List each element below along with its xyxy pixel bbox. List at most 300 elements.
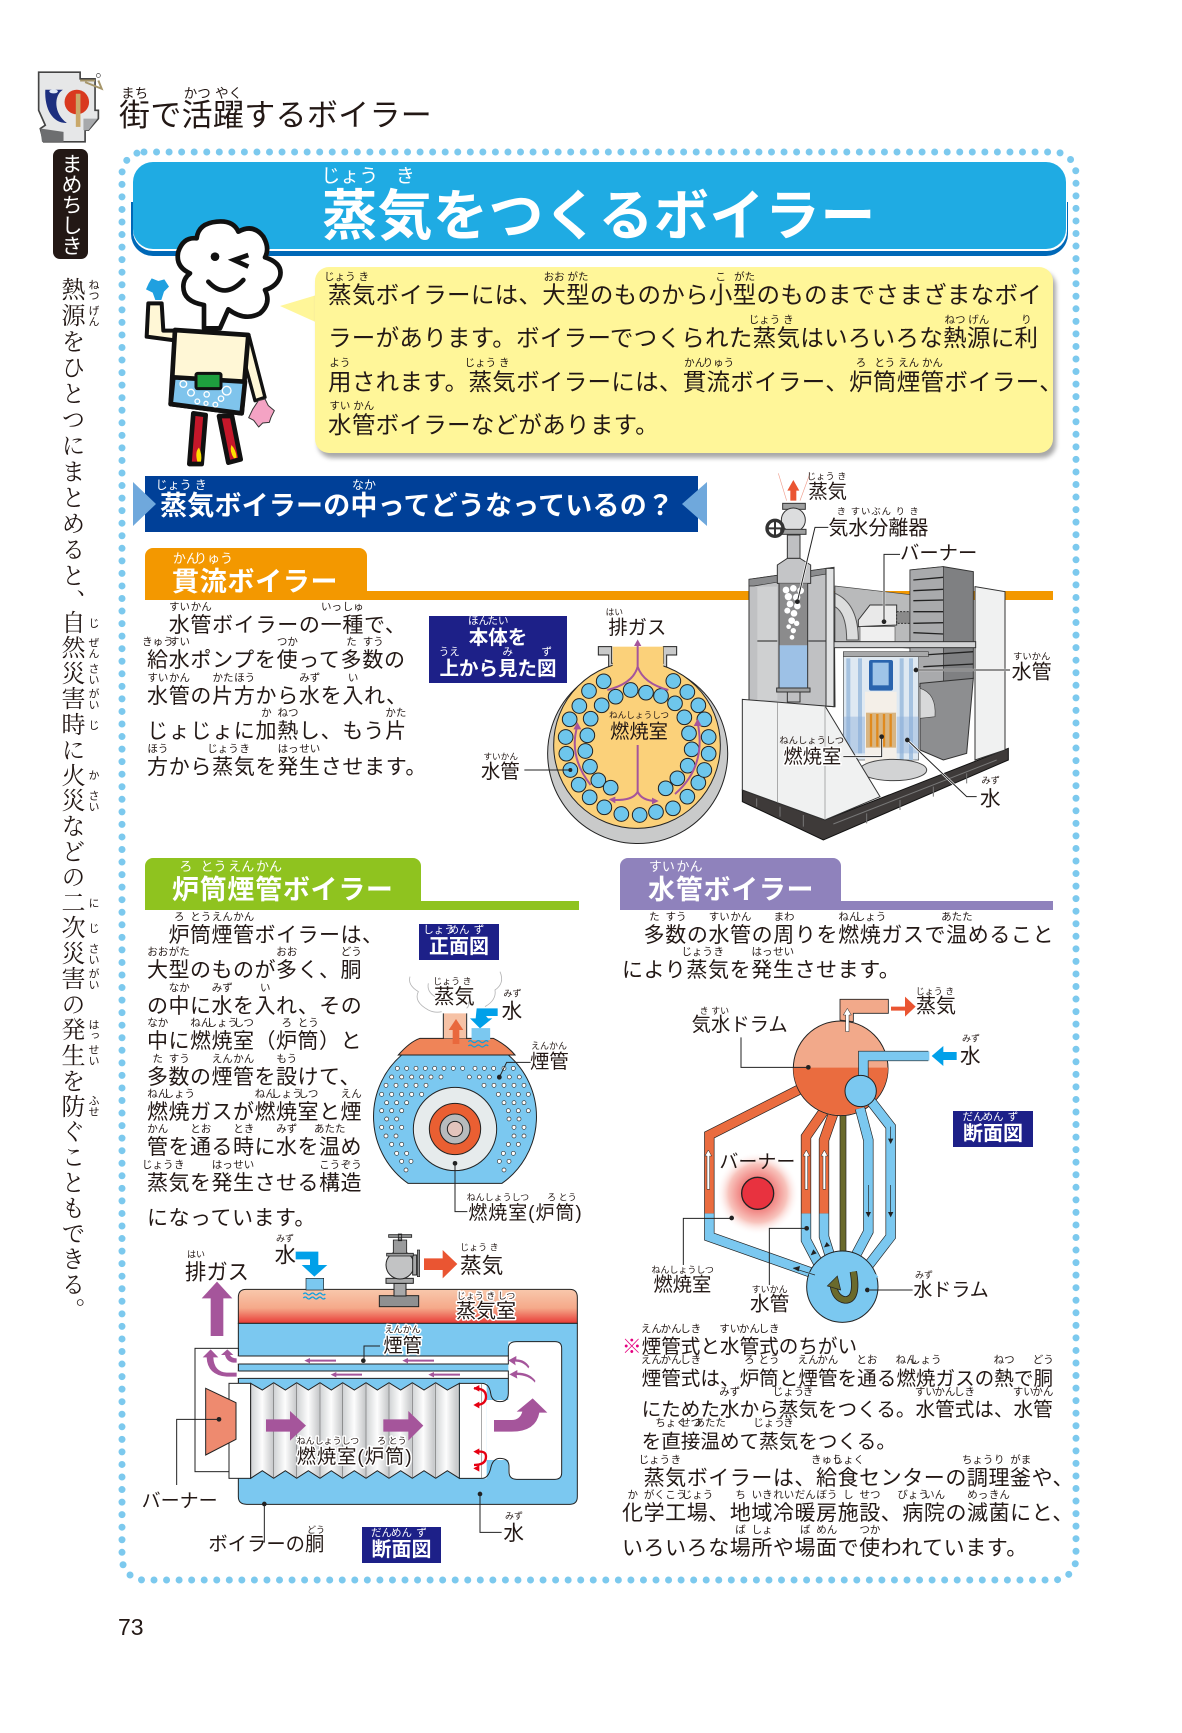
section banner: なか: [352, 478, 376, 492]
section tab: once-through boiler: りゅう: [194, 551, 233, 566]
section tab: fire-tube boiler: えん: [228, 859, 254, 874]
diagram: water-tube boiler cross section: 水管: [750, 1294, 789, 1316]
speech bubble: じょう: [324, 270, 356, 282]
label: front view: [419, 924, 499, 960]
closing paragraph: れい: [773, 1489, 794, 1501]
speech bubble: かん: [684, 357, 705, 369]
fire-tube boiler text: すう: [169, 1053, 190, 1065]
fire-tube boiler text: せい: [233, 1159, 254, 1171]
fire-tube boiler text: しょう: [164, 1088, 195, 1100]
label: top view: ず: [542, 646, 552, 658]
fire-tube boiler text: 大型のものが多く、胴: [147, 959, 362, 982]
text: きゅう: [811, 1454, 843, 1466]
diagram: water-tube boiler cross section: [651, 987, 989, 1323]
closing paragraph: いき: [752, 1489, 773, 1501]
fire-tube boiler text: の中に水を入れ、その: [147, 995, 362, 1018]
section tab: fire-tube boiler: 炉筒煙管ボイラー: [172, 875, 394, 905]
text: しょう: [855, 911, 886, 923]
diagram: water-tube boiler cross section: すいかん: [752, 1284, 788, 1294]
diagram: once-through boiler top view: ねんしょうしつ: [609, 710, 669, 720]
text: しょく: [833, 1454, 864, 1466]
text: すい: [709, 911, 730, 923]
fire-tube boiler text: がた: [169, 946, 190, 958]
text: はっ: [87, 1019, 99, 1041]
diagram: once-through boiler cutaway: 水: [980, 788, 1001, 810]
label: top view: 上から見た図: [439, 658, 557, 680]
fire-tube boiler text: なか: [169, 982, 190, 994]
text: ねつ: [87, 279, 99, 301]
speech bubble: おお: [544, 270, 565, 282]
note: difference between fire-tube and water-tube: ちょく: [655, 1417, 687, 1429]
note: difference between fire-tube and water-tube: ろ: [744, 1354, 755, 1366]
side column text, part 2: [57, 610, 100, 1323]
fire-tube boiler text: じょう: [142, 1159, 174, 1171]
label: cross section (fire-tube): 断面図: [372, 1539, 432, 1561]
closing paragraph: しょ: [752, 1524, 773, 1536]
speech bubble: とう: [874, 357, 895, 369]
closing paragraph: せつ: [859, 1489, 880, 1501]
once-through boiler text: きゅう: [142, 636, 174, 648]
text: に: [87, 897, 99, 908]
fire-tube boiler text: かん: [147, 1123, 168, 1135]
fire-tube boiler text: しつ: [298, 1088, 318, 1100]
once-through boiler text: 方から蒸気を発生させます。: [147, 756, 427, 779]
side column text, part 1: [57, 277, 100, 615]
speech bubble: えん: [898, 357, 919, 369]
fire-tube boiler text: しょう: [206, 1017, 238, 1029]
fire-tube boiler text: ねん: [255, 1088, 276, 1100]
text: か: [87, 770, 99, 781]
closing paragraph: 蒸気ボイラーは、給食センターの調理釜や、: [644, 1467, 1074, 1490]
label: top view: ほん: [468, 614, 489, 626]
diagram: fire-tube boiler cross section: じょう き しつ: [457, 1291, 515, 1301]
text: じ: [87, 923, 99, 934]
section tab: water-tube boiler: かん: [677, 859, 703, 874]
once-through boiler text: ねつ: [278, 707, 299, 719]
once-through boiler text: 水管の片方から水を入れ、: [147, 685, 408, 708]
orange section bar: [145, 591, 1053, 600]
speech bubble: こ: [716, 270, 726, 282]
chapter heading: 街で活躍するボイラー: [119, 98, 432, 133]
text: かん: [233, 911, 254, 923]
diagram: once-through boiler top view: すいかん: [483, 752, 518, 762]
note: difference between fire-tube and water-tube: ねん: [896, 1354, 917, 1366]
speech bubble: かん: [922, 357, 943, 369]
note: difference between fire-tube and water-tube: を直接温めて蒸気をつくる。: [642, 1430, 896, 1452]
diagram: fire-tube boiler front view: 燃焼室(炉筒): [468, 1202, 582, 1224]
text: すう: [666, 911, 687, 923]
text: しゅ: [343, 601, 364, 613]
once-through boiler text: ほう: [147, 743, 168, 755]
text: さい: [87, 663, 99, 685]
chapter icon: boiler cutaway: [38, 71, 104, 143]
water-tube boiler text: 多数の水管の周りを燃焼ガスで温めること: [644, 924, 1054, 947]
diagram: water-tube boiler cross section: 気水ドラム: [692, 1014, 788, 1036]
diagram: fire-tube boiler front view: ねんしょうしつ ろ とう: [467, 1193, 577, 1203]
text: り: [994, 1454, 1004, 1466]
diagram: fire-tube boiler cross section: みず: [276, 1233, 294, 1243]
text: かん: [730, 911, 751, 923]
diagram: once-through boiler top view: [481, 607, 728, 844]
diagram: once-through boiler cutaway: 気水分離器: [828, 516, 928, 539]
diagram: water-tube boiler cross section: バーナー: [719, 1152, 795, 1173]
label: top view: み: [502, 646, 513, 658]
section tab: water-tube boiler: [620, 858, 1053, 910]
section tab: once-through boiler: [145, 548, 367, 600]
speech bubble: ねつ: [944, 314, 965, 326]
closing paragraph: びょう: [897, 1489, 929, 1501]
diagram: fire-tube boiler cross section: 煙管: [383, 1335, 422, 1357]
speech bubble: がた: [567, 270, 588, 282]
text: かん: [660, 1322, 681, 1334]
diagram: once-through boiler cutaway: みず: [981, 776, 1000, 786]
diagram: fire-tube boiler front view: じょう き: [433, 977, 472, 987]
fire-tube boiler text: 多数の煙管を設けて、: [147, 1066, 361, 1089]
diagram: fire-tube boiler cross section: 蒸気: [460, 1253, 503, 1278]
text: じ: [87, 719, 99, 730]
label: front view: しょう: [423, 924, 455, 936]
section tab: water-tube boiler: 水管ボイラー: [648, 875, 814, 905]
fire-tube boiler text: みず: [212, 982, 233, 994]
water-tube boiler text: はっ: [752, 946, 773, 958]
speech bubble: き: [783, 314, 794, 326]
diagram: once-through boiler top view: 燃焼室: [610, 721, 668, 743]
closing paragraph: じょう: [682, 1489, 713, 1501]
section banner: 蒸気ボイラーの中ってどうなっているの？: [160, 491, 674, 521]
label: front view: めん: [448, 924, 470, 936]
main title banner: [131, 162, 1068, 256]
text: かつ: [184, 86, 211, 101]
note: difference between fire-tube and water-tube: しき: [680, 1354, 701, 1366]
once-through boiler text: はっ: [278, 743, 299, 755]
closing paragraph: し: [843, 1489, 854, 1501]
label: top view: [429, 616, 567, 683]
once-through boiler text: つか: [277, 636, 298, 648]
fire-tube boiler text: [142, 911, 384, 1230]
once-through boiler text: い: [348, 672, 358, 684]
fire-tube boiler text: 燃焼ガスが燃焼室と煙: [147, 1101, 362, 1124]
fire-tube boiler text: き: [174, 1159, 184, 1171]
diagram: fire-tube boiler front view: みず: [503, 988, 521, 998]
note: difference between fire-tube and water-tube: あたた: [694, 1417, 726, 1429]
fire-tube boiler text: しょう: [271, 1088, 302, 1100]
speech bubble: 用されます。蒸気ボイラーには、貫流ボイラー、炉筒煙管ボイラー、: [328, 369, 1063, 395]
text: さい: [87, 943, 99, 965]
text: えん: [212, 911, 233, 923]
text: じ: [87, 617, 99, 628]
speech bubble: き: [499, 357, 509, 369]
note: difference between fire-tube and water-tube: すい: [915, 1386, 936, 1398]
text: ろ: [174, 911, 184, 923]
text: まわ: [774, 911, 795, 923]
text: いっ: [321, 601, 342, 613]
label: cross section (fire-tube): だん: [371, 1526, 392, 1538]
section tab: water-tube boiler: すい: [649, 859, 675, 874]
note: difference between fire-tube and water-tube: じょう: [773, 1386, 804, 1398]
once-through boiler text: [142, 601, 427, 779]
text: がい: [87, 688, 99, 710]
diagram: fire-tube boiler cross section: えんかん: [385, 1325, 421, 1335]
text: ねん: [838, 911, 859, 923]
section tab: fire-tube boiler: [145, 858, 579, 910]
label: front view: 正面図: [429, 936, 489, 958]
text: さい: [87, 790, 99, 812]
note: difference between fire-tube and water-tube: みず: [719, 1386, 740, 1398]
speech bubble: じょう: [749, 314, 780, 326]
label: cross section (water-tube): 断面図: [963, 1123, 1023, 1145]
diagram: once-through boiler cutaway: じょう き: [807, 472, 847, 482]
diagram: water-tube boiler cross section: みず: [915, 1270, 933, 1280]
diagram: once-through boiler cutaway: ねんしょうしつ: [779, 736, 844, 746]
section banner: [133, 476, 707, 532]
once-through boiler text: かん: [169, 672, 190, 684]
fire-tube boiler text: 炉筒煙管ボイラーは、: [168, 924, 384, 947]
fire-tube boiler text: い: [260, 982, 270, 994]
closing paragraph: いん: [924, 1489, 945, 1501]
speech bubble: [280, 267, 1063, 461]
text: ぜん: [87, 637, 99, 659]
fire-tube boiler text: おお: [147, 946, 168, 958]
diagram: water-tube boiler cross section: 燃焼室: [653, 1274, 711, 1296]
speech bubble: き: [358, 270, 369, 282]
main title banner: じょう: [321, 166, 378, 187]
note: difference between fire-tube and water-tube: しき: [954, 1386, 975, 1398]
note: difference between fire-tube and water-tube: すい: [1013, 1386, 1034, 1398]
text: がま: [1010, 1454, 1031, 1466]
diagram: water-tube boiler cross section: 水: [960, 1045, 981, 1068]
water-tube boiler text: により蒸気を発生させます。: [622, 959, 900, 982]
fire-tube boiler text: こう: [319, 1159, 340, 1171]
diagram: fire-tube boiler cross section: どう: [307, 1525, 325, 1535]
fire-tube boiler text: た: [152, 1053, 163, 1065]
speech bubble: ラーがあります。ボイラーでつくられた蒸気はいろいろな熱源に利: [328, 325, 1038, 351]
closing paragraph: ち: [735, 1489, 746, 1501]
speech bubble: じょう: [465, 357, 496, 369]
text: かん: [739, 1322, 760, 1334]
diagram: fire-tube boiler cross section: みず: [505, 1511, 523, 1521]
fire-tube boiler text: もう: [276, 1053, 297, 1065]
text: ちょう: [962, 1454, 993, 1466]
fire-tube boiler text: はっ: [212, 1159, 233, 1171]
text: がい: [87, 968, 99, 990]
label: top view: 本体を: [469, 627, 527, 649]
note: difference between fire-tube and water-tube: どう: [1033, 1354, 1054, 1366]
note: difference between fire-tube and water-tube: かん: [660, 1354, 681, 1366]
once-through boiler text: か: [261, 707, 272, 719]
fire-tube boiler text: とお: [190, 1123, 211, 1135]
label: top view: うえ: [439, 646, 460, 658]
label: cross section (fire-tube): ず: [416, 1526, 427, 1538]
diagram: once-through boiler cutaway: バーナー: [900, 544, 977, 564]
note: difference between fire-tube and water-tube: しょう: [910, 1354, 941, 1366]
closing paragraph: つか: [859, 1524, 880, 1536]
fire-tube boiler text: えん: [341, 1088, 362, 1100]
diagram: once-through boiler top view: 排ガス: [608, 617, 666, 639]
diagram: fire-tube boiler front view: 蒸気: [434, 985, 475, 1008]
text: じょう: [639, 1454, 670, 1466]
note: difference between fire-tube and water-tube: ※煙管式と水管式のちがい: [622, 1336, 857, 1358]
speech bubble: ろ: [856, 357, 866, 369]
side label: mamechishiki: まめちしき: [59, 153, 82, 255]
text: しき: [680, 1322, 701, 1334]
once-through boiler text: せい: [299, 743, 320, 755]
label: cross section (water-tube): ず: [1008, 1110, 1018, 1122]
diagram: fire-tube boiler front view: 水: [502, 1000, 523, 1023]
water-tube boiler text: せい: [773, 946, 794, 958]
label: cross section (fire-tube): めん: [391, 1526, 412, 1538]
fire-tube boiler text: しつ: [234, 1017, 254, 1029]
closing paragraph: か: [628, 1489, 638, 1501]
diagram: water-tube boiler cross section: き すい: [700, 1006, 729, 1016]
note: difference between fire-tube and water-tube: かん: [817, 1354, 838, 1366]
closing paragraph: がく: [644, 1489, 665, 1501]
diagram: water-tube boiler cross section: じょう き: [916, 987, 954, 997]
closing paragraph: だん: [795, 1489, 816, 1501]
note: difference between fire-tube and water-tube: えん: [798, 1354, 819, 1366]
diagram: fire-tube boiler cross section: はい: [187, 1249, 205, 1259]
fire-tube boiler text: ろ: [282, 1017, 292, 1029]
side label: mamechishiki: [53, 149, 88, 259]
diagram: once-through boiler top view: はい: [606, 607, 623, 617]
note: difference between fire-tube and water-tube: かん: [1032, 1386, 1053, 1398]
mascot character: [144, 219, 283, 466]
once-through boiler text: すい: [147, 672, 168, 684]
fire-tube boiler text: ねん: [190, 1017, 211, 1029]
speech bubble: 水管ボイラーなどがあります。: [328, 412, 659, 438]
diagram: fire-tube boiler cross section: バーナー: [142, 1491, 218, 1512]
once-through boiler text: すう: [363, 636, 384, 648]
diagram: fire-tube boiler front view: えんかん: [531, 1041, 567, 1051]
diagram: once-through boiler cutaway: き すいぶん り き: [837, 507, 920, 517]
fire-tube boiler text: 蒸気を発生させる構造: [147, 1172, 362, 1195]
diagram: water-tube boiler cross section: 水ドラム: [913, 1279, 989, 1301]
text: せい: [87, 1044, 99, 1066]
fire-tube boiler text: えん: [212, 1053, 233, 1065]
fire-tube boiler text: みず: [276, 1123, 297, 1135]
section tab: once-through boiler: かん: [173, 551, 199, 566]
diagram: fire-tube boiler cross section: [142, 1233, 578, 1556]
speech bubble: げん: [968, 314, 989, 326]
diagram: fire-tube boiler cross section: 排ガス: [185, 1260, 249, 1284]
speech bubble: りゅう: [703, 357, 734, 369]
speech bubble: よう: [329, 357, 350, 369]
note: difference between fire-tube and water-tube: ねつ: [994, 1354, 1015, 1366]
diagram: once-through boiler cutaway: 燃焼室: [783, 746, 841, 768]
fire-tube boiler text: 管を通る時に水を温め: [147, 1136, 362, 1159]
section banner: じょう: [156, 478, 192, 492]
text: き: [671, 1454, 681, 1466]
text: かん: [191, 601, 212, 613]
fire-tube boiler text: 中に燃焼室（炉筒）と: [147, 1030, 362, 1053]
text: げん: [87, 305, 99, 327]
note: difference between fire-tube and water-tube: じょう: [753, 1417, 785, 1429]
water-tube boiler text: [622, 911, 1054, 982]
water-tube boiler text: き: [714, 946, 724, 958]
speech bubble: り: [1021, 314, 1032, 326]
label: front view: ず: [474, 924, 484, 936]
diagram: once-through boiler cutaway: 水管: [1012, 660, 1052, 683]
main title banner: 蒸気をつくるボイラー: [322, 185, 876, 247]
diagram: fire-tube boiler cross section: ボイラーの胴: [208, 1534, 324, 1556]
fire-tube boiler text: おお: [276, 946, 297, 958]
once-through boiler text: 給水ポンプを使って多数の: [147, 649, 406, 672]
speech bubble: がた: [734, 270, 755, 282]
label: cross section (water-tube): だん: [962, 1110, 984, 1122]
diagram: water-tube boiler cross section: みず: [962, 1033, 980, 1043]
text: すい: [169, 601, 190, 613]
speech bubble: すい: [329, 400, 350, 412]
diagram: fire-tube boiler front view: [373, 972, 582, 1224]
closing paragraph: めっ: [967, 1489, 988, 1501]
note: difference between fire-tube and water-tube: とう: [758, 1354, 779, 1366]
fire-tube boiler text: ねん: [147, 1088, 168, 1100]
note: difference between fire-tube and water-tube: 煙管式は、炉筒と煙管を通る燃焼ガスの熱で胴: [642, 1368, 1053, 1390]
diagram: fire-tube boiler front view: 煙管: [530, 1051, 569, 1073]
section tab: fire-tube boiler: かん: [256, 859, 282, 874]
fire-tube boiler text: なか: [147, 1017, 168, 1029]
closing paragraph: ば: [735, 1524, 746, 1536]
label: cross section (fire-tube): [362, 1527, 441, 1563]
section banner: き: [195, 478, 207, 492]
diagram: water-tube boiler cross section: 蒸気: [916, 995, 956, 1018]
text: やく: [215, 86, 242, 101]
diagram: fire-tube boiler cross section: 水: [503, 1522, 524, 1545]
closing paragraph: いろいろな場所や場面で使われています。: [622, 1537, 1028, 1560]
label: cross section (water-tube): [953, 1111, 1033, 1147]
note: difference between fire-tube and water-tube: にためた水から蒸気をつくる。水管式は、水管: [642, 1399, 1053, 1421]
side column text, part 2: 自 然 災 害 時 に 火 災 などの 二 次 災 害 の 発 生 を 防 ぐこともできる。: [57, 610, 83, 1323]
fire-tube boiler text: になっています。: [147, 1207, 316, 1230]
section tab: once-through boiler: 貫流ボイラー: [172, 567, 338, 597]
diagram: once-through boiler cutaway: 蒸気: [808, 481, 847, 503]
section tab: fire-tube boiler: とう: [201, 859, 227, 874]
closing paragraph: 化学工場、地域冷暖房施設、病院の滅菌にと、: [622, 1502, 1074, 1525]
once-through boiler text: 水管ボイラーの一種で、: [169, 614, 407, 637]
diagram: fire-tube boiler cross section: じょう き: [460, 1243, 499, 1253]
note: difference between fire-tube and water-tube: せつ: [680, 1417, 701, 1429]
label: cross section (water-tube): めん: [982, 1110, 1004, 1122]
text: とう: [190, 911, 211, 923]
speech bubble: 蒸気ボイラーには、大型のものから小型のものまでさまざまなボイ: [328, 282, 1042, 308]
diagram: once-through boiler top view: 水管: [481, 761, 520, 783]
fire-tube boiler text: あたた: [314, 1123, 346, 1135]
fire-tube boiler text: ぞう: [341, 1159, 362, 1171]
note: difference between fire-tube and water-tube: [622, 1322, 1054, 1452]
page number: 73: [118, 1614, 144, 1640]
diagram: fire-tube boiler cross section: 燃焼室(炉筒): [297, 1446, 412, 1468]
once-through boiler text: みず: [299, 672, 320, 684]
once-through boiler text: かた: [212, 672, 233, 684]
diagram: once-through boiler cutaway: [742, 472, 1052, 840]
once-through boiler text: じょじょに加熱し、もう片: [147, 720, 407, 743]
text: た: [649, 911, 660, 923]
side column text, part 1: 熱 源 をひとつにまとめると、: [57, 277, 83, 615]
closing paragraph: [622, 1454, 1074, 1560]
once-through boiler text: じょう: [207, 743, 239, 755]
note: difference between fire-tube and water-tube: とお: [856, 1354, 877, 1366]
note: difference between fire-tube and water-tube: き: [783, 1417, 794, 1429]
closing paragraph: ぼう: [816, 1489, 837, 1501]
diagram: fire-tube boiler cross section: 水: [275, 1244, 296, 1268]
text: すい: [719, 1322, 740, 1334]
section tab: fire-tube boiler: ろ: [179, 859, 192, 874]
speech bubble: かん: [353, 400, 374, 412]
text: まち: [121, 86, 148, 101]
note: difference between fire-tube and water-tube: かん: [934, 1386, 955, 1398]
text: しき: [758, 1322, 779, 1334]
closing paragraph: めん: [816, 1524, 837, 1536]
label: top view: たい: [487, 614, 508, 626]
